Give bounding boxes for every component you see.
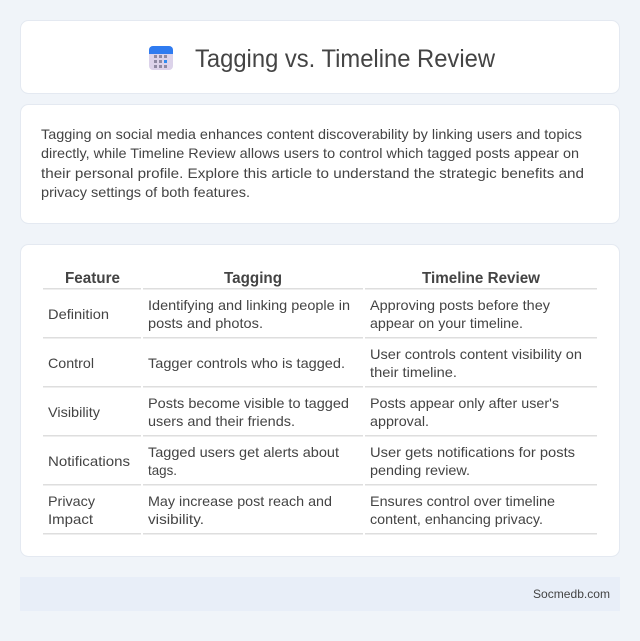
row: privacy impact: Privacy: [48, 493, 95, 509]
row: notifications: [48, 444, 575, 478]
icon: calendar: [149, 46, 173, 70]
table header row: Tagging: [224, 270, 282, 287]
row: visibility: Posts become visible to tagged: [148, 395, 349, 411]
row: visibility: Visibility: [48, 404, 100, 420]
row: control: User controls content visibility on: [370, 346, 582, 362]
panel: comparison table: [20, 244, 620, 556]
row: notifications: pending review.: [370, 462, 470, 478]
row: notifications: User gets notifications for posts: [370, 444, 575, 460]
row: visibility: [48, 395, 559, 429]
row: notifications: tags.: [148, 462, 177, 478]
panel: intro text: [20, 104, 620, 224]
row: privacy impact: Ensures control over timeline: [370, 493, 555, 509]
row: notifications: Tagged users get alerts about: [148, 444, 339, 460]
row: definition: appear on your timeline.: [370, 315, 523, 331]
panel: intro text: Tagging on social media enhances content discoverability by linking users and topics: [41, 126, 582, 142]
row: definition: [48, 297, 550, 331]
row: definition: Identifying and linking people in: [148, 297, 350, 313]
row: control: Control: [48, 355, 94, 371]
footer: [20, 577, 620, 611]
row: visibility: approval.: [370, 413, 429, 429]
row: definition: posts and photos.: [148, 315, 263, 331]
row: definition: Approving posts before they: [370, 297, 550, 313]
row: control: [48, 346, 582, 380]
row: privacy impact: [48, 493, 555, 527]
row: privacy impact: content, enhancing privacy.: [370, 511, 543, 527]
row: control: their timeline.: [370, 364, 457, 380]
row: definition: Definition: [48, 306, 109, 322]
row: privacy impact: Impact: [48, 511, 93, 527]
panel: intro text: privacy settings of both features.: [41, 184, 250, 200]
panel: intro text: directly, while Timeline Review allows users to control which tagged posts appear on: [41, 145, 579, 161]
table header row: Feature: [65, 270, 120, 287]
footer: Socmedb.com: [533, 587, 610, 601]
row: visibility: users and their friends.: [148, 413, 295, 429]
title: Tagging vs. Timeline Review: [195, 45, 496, 73]
row: privacy impact: May increase post reach and: [148, 493, 332, 509]
row: privacy impact: visibility.: [148, 511, 204, 527]
table header row: Timeline Review: [422, 270, 541, 287]
table header row: [65, 270, 541, 287]
panel: title header: [20, 20, 620, 94]
row: visibility: Posts appear only after user's: [370, 395, 559, 411]
panel: intro text: their personal profile. Explore this article to understand the strategic benefits and: [41, 165, 584, 181]
row: notifications: Notifications: [48, 453, 130, 469]
row: control: Tagger controls who is tagged.: [148, 355, 345, 371]
